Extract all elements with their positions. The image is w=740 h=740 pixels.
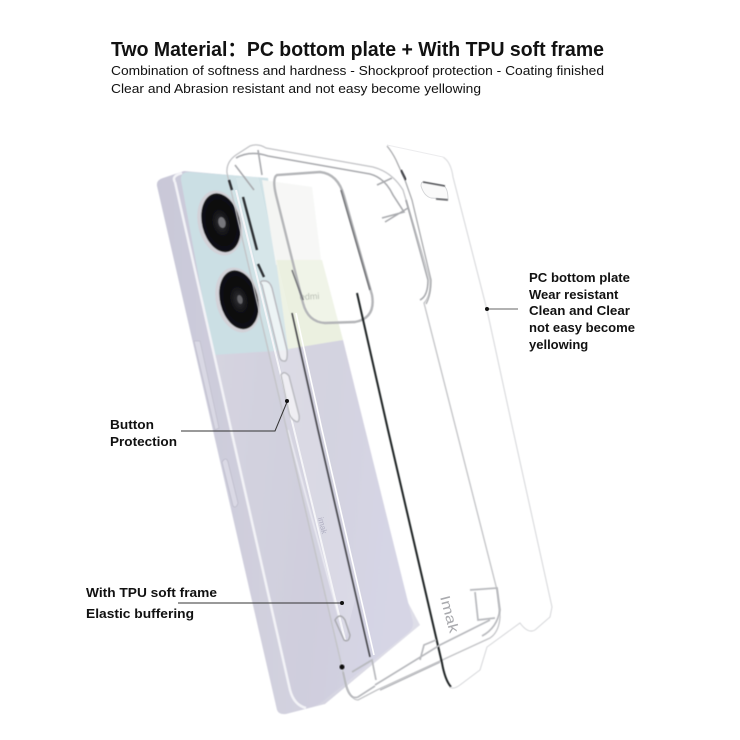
frame white line beside dark line: [296, 313, 374, 655]
label: PC bottom plate: Wear resistant: [529, 287, 619, 302]
label: PC bottom plate: yellowing: [529, 337, 588, 352]
back seam highlight: [288, 430, 345, 640]
plate dark glint: [401, 170, 406, 180]
subtitle line 1: Combination of softness and hardness - Shockproof protection - Coating finished: [111, 64, 604, 78]
back panel teal: [181, 172, 290, 355]
camera island pale: [262, 180, 321, 265]
slot dark edge: [423, 182, 448, 200]
charging port: [335, 616, 350, 641]
dark edge on top left: [229, 180, 264, 277]
frame black edge line: [357, 293, 451, 687]
leader: TPU soft frame: [178, 601, 344, 605]
label: PC bottom plate: Clean and Clear: [529, 303, 630, 318]
side button upper: [194, 341, 219, 430]
label: button protection: Button: [110, 417, 154, 432]
PC bottom plate: [387, 145, 552, 688]
frame left band: [236, 176, 355, 640]
frame left inner edge: [236, 190, 345, 640]
bottom corners: [343, 588, 500, 698]
camera lens lower: [209, 263, 267, 337]
frame translucent fill: [227, 145, 500, 700]
Redmi logo text on phone: edmi: [300, 291, 320, 302]
back panel green: [276, 260, 343, 349]
phone side frame: [157, 171, 420, 714]
label: PC bottom plate: PC bottom plate: [529, 270, 630, 285]
leader: button protection: [181, 399, 289, 431]
button cover upper: [261, 281, 287, 361]
bottom black mark: [340, 664, 344, 670]
TPU frame body: [227, 145, 500, 700]
plate top edge: [387, 145, 443, 157]
camera lens upper: [191, 186, 249, 260]
label: PC bottom plate: [529, 270, 635, 352]
label: PC bottom plate: not easy become: [529, 320, 635, 335]
imak logo: Imak: [437, 594, 463, 636]
camera cutout: [274, 172, 373, 323]
frame dark inner line: [292, 313, 370, 657]
back panel lilac: [213, 340, 413, 707]
button cover lower: [281, 373, 299, 422]
side button lower: [222, 459, 238, 507]
frame outer outlines: [227, 145, 500, 700]
label: button protection: [110, 417, 177, 449]
label: TPU soft frame: With TPU soft frame: [86, 585, 217, 600]
label: button protection: Protection: [110, 434, 177, 449]
subtitle line 2: Clear and Abrasion resistant and not easy become yellowing: [111, 82, 481, 96]
side highlight: [174, 173, 306, 708]
plate outline: [443, 157, 552, 688]
frame inner corner details: [235, 150, 428, 300]
leader: PC bottom plate: [485, 307, 518, 311]
camera slot: [421, 182, 448, 199]
title: Two Material：PC bottom plate + With TPU soft frame: [111, 39, 604, 61]
camera cutout veil: [274, 172, 373, 323]
imak on phone: imak: [316, 516, 329, 536]
camera cutout shadow: [292, 190, 370, 300]
plate left edge dark: [387, 146, 431, 304]
label: TPU soft frame: [86, 585, 217, 621]
phone body: [157, 171, 420, 714]
label: TPU soft frame: Elastic buffering: [86, 606, 194, 621]
